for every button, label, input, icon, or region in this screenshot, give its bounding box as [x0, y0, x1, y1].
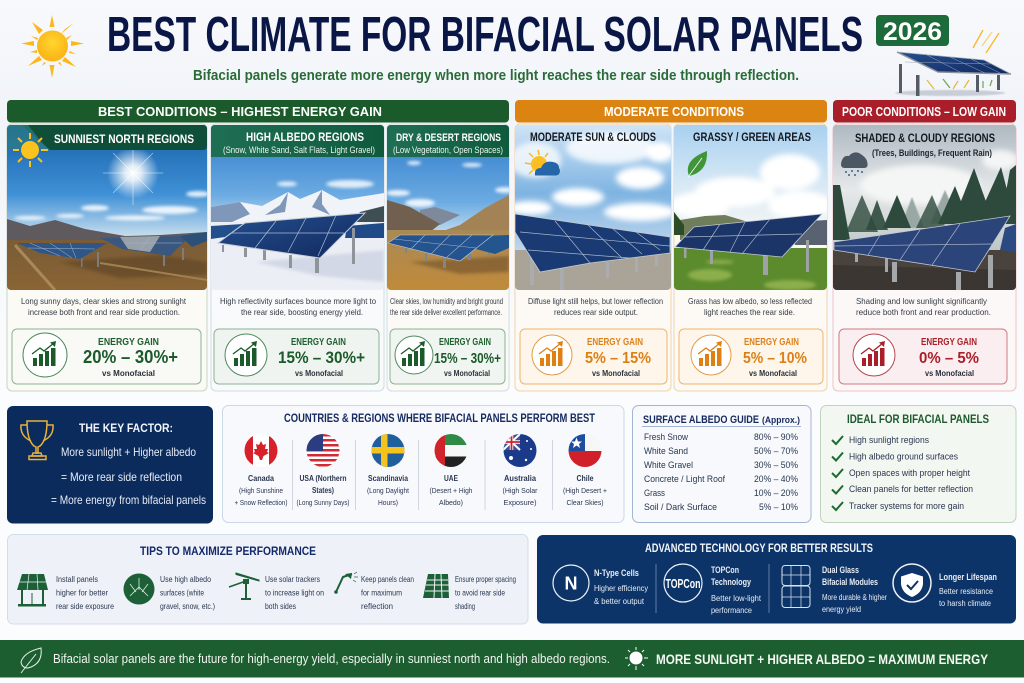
moderate description — [528, 296, 663, 317]
key factor text: = More energy from bifacial panels — [51, 493, 206, 507]
albedo table: 5% – 10% — [759, 502, 798, 512]
icon: bifacial solar panel with arrows — [895, 30, 1011, 96]
panel: tips to maximize performance — [8, 534, 528, 624]
country labels: + Snow Reflection) — [234, 498, 288, 507]
icon: white sun — [625, 647, 648, 670]
dual glass text: energy yield — [822, 605, 861, 614]
albedo table: 30% – 50% — [754, 460, 798, 470]
icon: TOPCon: TOPCon — [666, 576, 701, 591]
ideal checklist: Clean panels for better reflection — [849, 484, 973, 494]
icon: albedo reflection — [124, 574, 154, 604]
energy gain box 5-15: ENERGY GAIN — [587, 337, 643, 348]
lifespan text — [939, 572, 997, 608]
tip text 5: shading — [455, 602, 475, 611]
key factor text — [51, 445, 206, 507]
tip text 4: for maximum — [361, 588, 402, 598]
icon: shield — [893, 564, 931, 602]
country labels: Exposure) — [504, 498, 537, 507]
dual glass text: Bifacial Modules — [822, 577, 878, 587]
icon: N-type — [553, 565, 589, 601]
country labels: Canada — [248, 474, 274, 483]
country labels — [234, 474, 608, 507]
panel: surface albedo guide — [632, 406, 811, 522]
footer message: Bifacial solar panels are the future for high-energy yield, especially in sunniest north and high albedo regions. — [53, 651, 610, 666]
photo: sunny solar field — [7, 125, 210, 290]
tip text 3: both sides — [265, 602, 296, 611]
albedo heading: SURFACE ALBEDO GUIDE — [643, 414, 759, 426]
albedo table: 20% – 40% — [754, 474, 798, 484]
panel: ideal for bifacial panels — [820, 406, 1016, 522]
albedo table: 80% – 90% — [754, 432, 798, 442]
tip text 3: to increase light on — [265, 588, 324, 598]
photo: cloudy solar field — [508, 125, 676, 290]
footer banner — [0, 640, 1024, 678]
albedo table: Soil / Dark Surface — [644, 502, 717, 512]
albedo table: Concrete / Light Roof — [644, 474, 726, 484]
section header: moderate conditions — [515, 100, 827, 122]
panel: advanced technology — [537, 535, 1016, 624]
energy gain box 0-5: 0% – 5% — [919, 350, 979, 367]
N-type text: & better output — [594, 597, 645, 606]
energy gain box 0-5: vs Monofacial — [925, 369, 974, 378]
country labels: (High Desert + — [563, 486, 608, 495]
albedo table: 10% – 20% — [754, 488, 798, 498]
tip text 4 — [361, 575, 414, 611]
N-type text: N-Type Cells — [594, 568, 639, 578]
energy gain box 5-10: ENERGY GAIN — [744, 337, 799, 348]
country labels: (Long Daylight — [367, 486, 410, 495]
country labels: (High Solar — [502, 486, 538, 495]
country labels: UAE — [444, 474, 459, 483]
icon: TOPCon — [664, 564, 702, 602]
key factor heading: THE KEY FACTOR: — [79, 421, 173, 435]
energy gain box 0-5 — [839, 329, 1007, 384]
flag: Canada — [244, 436, 278, 465]
shaded description: reduce both front and rear production. — [856, 307, 991, 317]
dry description — [390, 297, 503, 317]
panel: high albedo regions — [211, 124, 384, 391]
ideal checklist: Open spaces with proper height — [849, 468, 970, 478]
key factor text: = More rear side reflection — [61, 470, 182, 484]
dry description: the rear side deliver excellent performance. — [390, 308, 502, 317]
energy gain box 15-30: ENERGY GAIN — [291, 337, 346, 348]
tip text 3: Use solar trackers — [265, 575, 320, 584]
energy gain box 20-30 — [12, 329, 201, 384]
icon: trophy — [21, 421, 53, 460]
photo: shaded forest solar field — [833, 125, 1018, 290]
flag: UAE — [434, 434, 468, 468]
icon: leaf outline — [21, 648, 41, 673]
TOPCon text — [711, 565, 762, 615]
energy gain box 20-30: ENERGY GAIN — [98, 336, 159, 348]
flag: Chile — [568, 434, 602, 468]
dry subheading: (Low Vegetation, Open Spaces) — [393, 145, 503, 155]
tips heading: TIPS TO MAXIMIZE PERFORMANCE — [140, 546, 316, 558]
panel: countries and regions — [222, 406, 624, 522]
shaded subheading: (Trees, Buildings, Frequent Rain) — [872, 148, 992, 158]
country labels: Clear Skies) — [566, 498, 604, 507]
high albedo description: High reflectivity surfaces bounce more light to — [220, 296, 376, 306]
high albedo label band — [211, 125, 384, 157]
icon: cleaning spray — [334, 572, 358, 594]
icon: N-type: N — [564, 574, 578, 594]
TOPCon text: performance — [711, 606, 752, 615]
albedo heading: (Approx.) — [762, 415, 800, 426]
lifespan text: to harsh climate — [939, 599, 992, 608]
tip text 4: reflection — [361, 602, 393, 611]
energy gain box 0-5: ENERGY GAIN — [921, 337, 977, 348]
panel: moderate sun and clouds — [508, 124, 676, 391]
N-type text: Higher efficiency — [594, 584, 648, 593]
TOPCon text: Technology — [711, 577, 751, 587]
energy gain box 5-10 — [679, 329, 823, 384]
ideal checklist: Tracker systems for more gain — [849, 501, 964, 511]
country labels: Chile — [576, 474, 594, 483]
energy gain box 15-30 narrow: vs Monofacial — [444, 369, 490, 378]
energy gain box 20-30: 20% – 30%+ — [83, 347, 178, 367]
icon: raised panel — [17, 574, 48, 606]
tip text 1: higher for better — [56, 588, 108, 598]
ideal heading: IDEAL FOR BIFACIAL PANELS — [847, 414, 989, 426]
tip text 4: Keep panels clean — [361, 575, 414, 584]
energy gain box 5-15: 5% – 15% — [585, 350, 651, 367]
shaded description — [856, 296, 991, 317]
year badge: 2026 — [883, 18, 942, 46]
country labels: Albedo) — [439, 498, 463, 507]
tip text 5: Ensure proper spacing — [455, 575, 516, 584]
panel: grassy green areas — [670, 124, 832, 391]
flag: USA — [306, 434, 340, 468]
moderate description: Diffuse light still helps, but lower reflection — [528, 296, 663, 306]
albedo table: Grass — [644, 488, 666, 498]
high albedo description — [220, 296, 376, 317]
sunniest description: Long sunny days, clear skies and strong sunlight — [21, 296, 187, 306]
technology heading: ADVANCED TECHNOLOGY FOR BETTER RESULTS — [645, 543, 873, 555]
sunniest description — [21, 296, 187, 317]
energy gain box 5-15 — [520, 329, 667, 384]
energy gain box 5-10: vs Monofacial — [749, 369, 797, 378]
photo: desert solar field — [386, 125, 515, 290]
tip text 2 — [160, 575, 215, 611]
albedo table: White Sand — [644, 446, 688, 456]
icon: green leaf — [688, 151, 707, 177]
section header: moderate conditions: MODERATE CONDITIONS — [604, 104, 744, 119]
albedo table: 50% – 70% — [754, 446, 798, 456]
dual glass text: Dual Glass — [822, 565, 859, 575]
ideal checklist — [832, 435, 973, 511]
grassy description — [688, 296, 812, 317]
tip text 2: Use high albedo — [160, 575, 211, 584]
country labels: States) — [312, 486, 334, 495]
panel: sunniest north regions — [7, 124, 210, 391]
sunniest heading: SUNNIEST NORTH REGIONS — [54, 132, 194, 146]
high albedo heading: HIGH ALBEDO REGIONS — [246, 130, 364, 144]
energy gain box 20-30: vs Monofacial — [102, 369, 155, 378]
energy gain box 5-10: 5% – 10% — [743, 350, 807, 367]
icon: sun badge — [13, 133, 48, 167]
energy gain box 15-30 narrow — [390, 329, 505, 384]
grassy description: Grass has low albedo, so less reflected — [688, 296, 812, 306]
country labels: Scandinavia — [368, 474, 408, 483]
subtitle: Bifacial panels generate more energy when more light reaches the rear side through reflection. — [193, 68, 799, 84]
country labels: (High Sunshine — [239, 486, 283, 495]
shaded description: Shading and low sunlight significantly — [856, 296, 988, 306]
flag: Australia — [503, 434, 537, 468]
year badge — [876, 15, 949, 46]
energy gain box 15-30 — [214, 329, 379, 384]
high albedo description: the rear side, boosting energy yield. — [241, 307, 363, 317]
country labels: (Long Sunny Days) — [296, 498, 350, 507]
dual glass text: More durable & higher — [822, 593, 887, 602]
tip text 5: to avoid rear side — [455, 588, 505, 598]
section header: poor conditions — [833, 100, 1016, 122]
albedo table — [644, 432, 798, 512]
TOPCon text: Better low-light — [711, 594, 762, 603]
tip text 2: surfaces (white — [160, 588, 204, 598]
icon: spaced panels — [423, 574, 449, 598]
moderate heading: MODERATE SUN & CLOUDS — [530, 132, 656, 144]
countries heading: COUNTRIES & REGIONS WHERE BIFACIAL PANELS PERFORM BEST — [284, 413, 595, 425]
key factor text: More sunlight + Higher albedo — [61, 445, 196, 459]
tip text 5 — [455, 575, 516, 611]
photo: grassy solar field — [670, 125, 832, 290]
grassy description: light reaches the rear side. — [704, 307, 795, 317]
section header: best conditions — [7, 100, 509, 122]
country labels: (Desert + High — [430, 486, 472, 495]
dry description: Clear skies, low humidity and bright ground — [390, 297, 503, 306]
tip text 1: rear side exposure — [56, 602, 114, 611]
energy gain box 15-30: vs Monofacial — [295, 369, 343, 378]
dry label band — [387, 125, 509, 157]
photo: snow solar field — [211, 125, 384, 290]
tip text 3 — [265, 575, 324, 611]
country labels: Australia — [504, 474, 537, 483]
tip text 1 — [56, 575, 114, 611]
ideal checklist: High sunlight regions — [849, 435, 929, 445]
high albedo subheading: (Snow, White Sand, Salt Flats, Light Gravel) — [223, 145, 375, 156]
icon: sun behind cloud — [525, 150, 560, 176]
icon: solar tracker — [229, 573, 259, 600]
tip text 1: Install panels — [56, 575, 98, 584]
lifespan text: Longer Lifespan — [939, 572, 997, 582]
albedo table: Fresh Snow — [644, 432, 689, 442]
icon: sun — [21, 15, 84, 78]
panel: shaded and cloudy regions — [833, 124, 1018, 391]
icon: rain cloud — [841, 152, 868, 176]
TOPCon text: TOPCon — [711, 565, 739, 575]
moderate description: reduces rear side output. — [554, 307, 638, 317]
energy gain box 5-15: vs Monofacial — [592, 369, 640, 378]
sunniest label band — [22, 125, 207, 150]
shaded heading: SHADED & CLOUDY REGIONS — [855, 133, 995, 145]
energy gain box 15-30 narrow: ENERGY GAIN — [439, 337, 491, 348]
energy gain box 15-30 narrow: 15% – 30%+ — [434, 350, 501, 367]
lifespan text: Better resistance — [939, 587, 993, 596]
country labels: USA (Northern — [300, 474, 347, 483]
ideal checklist: High albedo ground surfaces — [849, 452, 958, 462]
country labels: Hours) — [378, 498, 398, 507]
sunniest description: increase both front and rear side production. — [28, 307, 180, 317]
energy gain box 15-30: 15% – 30%+ — [278, 348, 365, 367]
flag: Sweden — [371, 434, 405, 468]
dry heading: DRY & DESERT REGIONS — [396, 132, 501, 144]
albedo table: White Gravel — [644, 460, 693, 470]
tip text 2: gravel, snow, etc.) — [160, 602, 215, 611]
N-type text — [594, 568, 648, 606]
grassy heading: GRASSY / GREEN AREAS — [693, 132, 811, 144]
section header: best conditions: BEST CONDITIONS – HIGHEST ENERGY GAIN — [98, 104, 382, 119]
panel: dry and desert regions — [386, 124, 515, 391]
panel: key factor — [7, 406, 213, 524]
dual glass text — [822, 565, 887, 614]
icon: dual glass module — [782, 566, 810, 608]
